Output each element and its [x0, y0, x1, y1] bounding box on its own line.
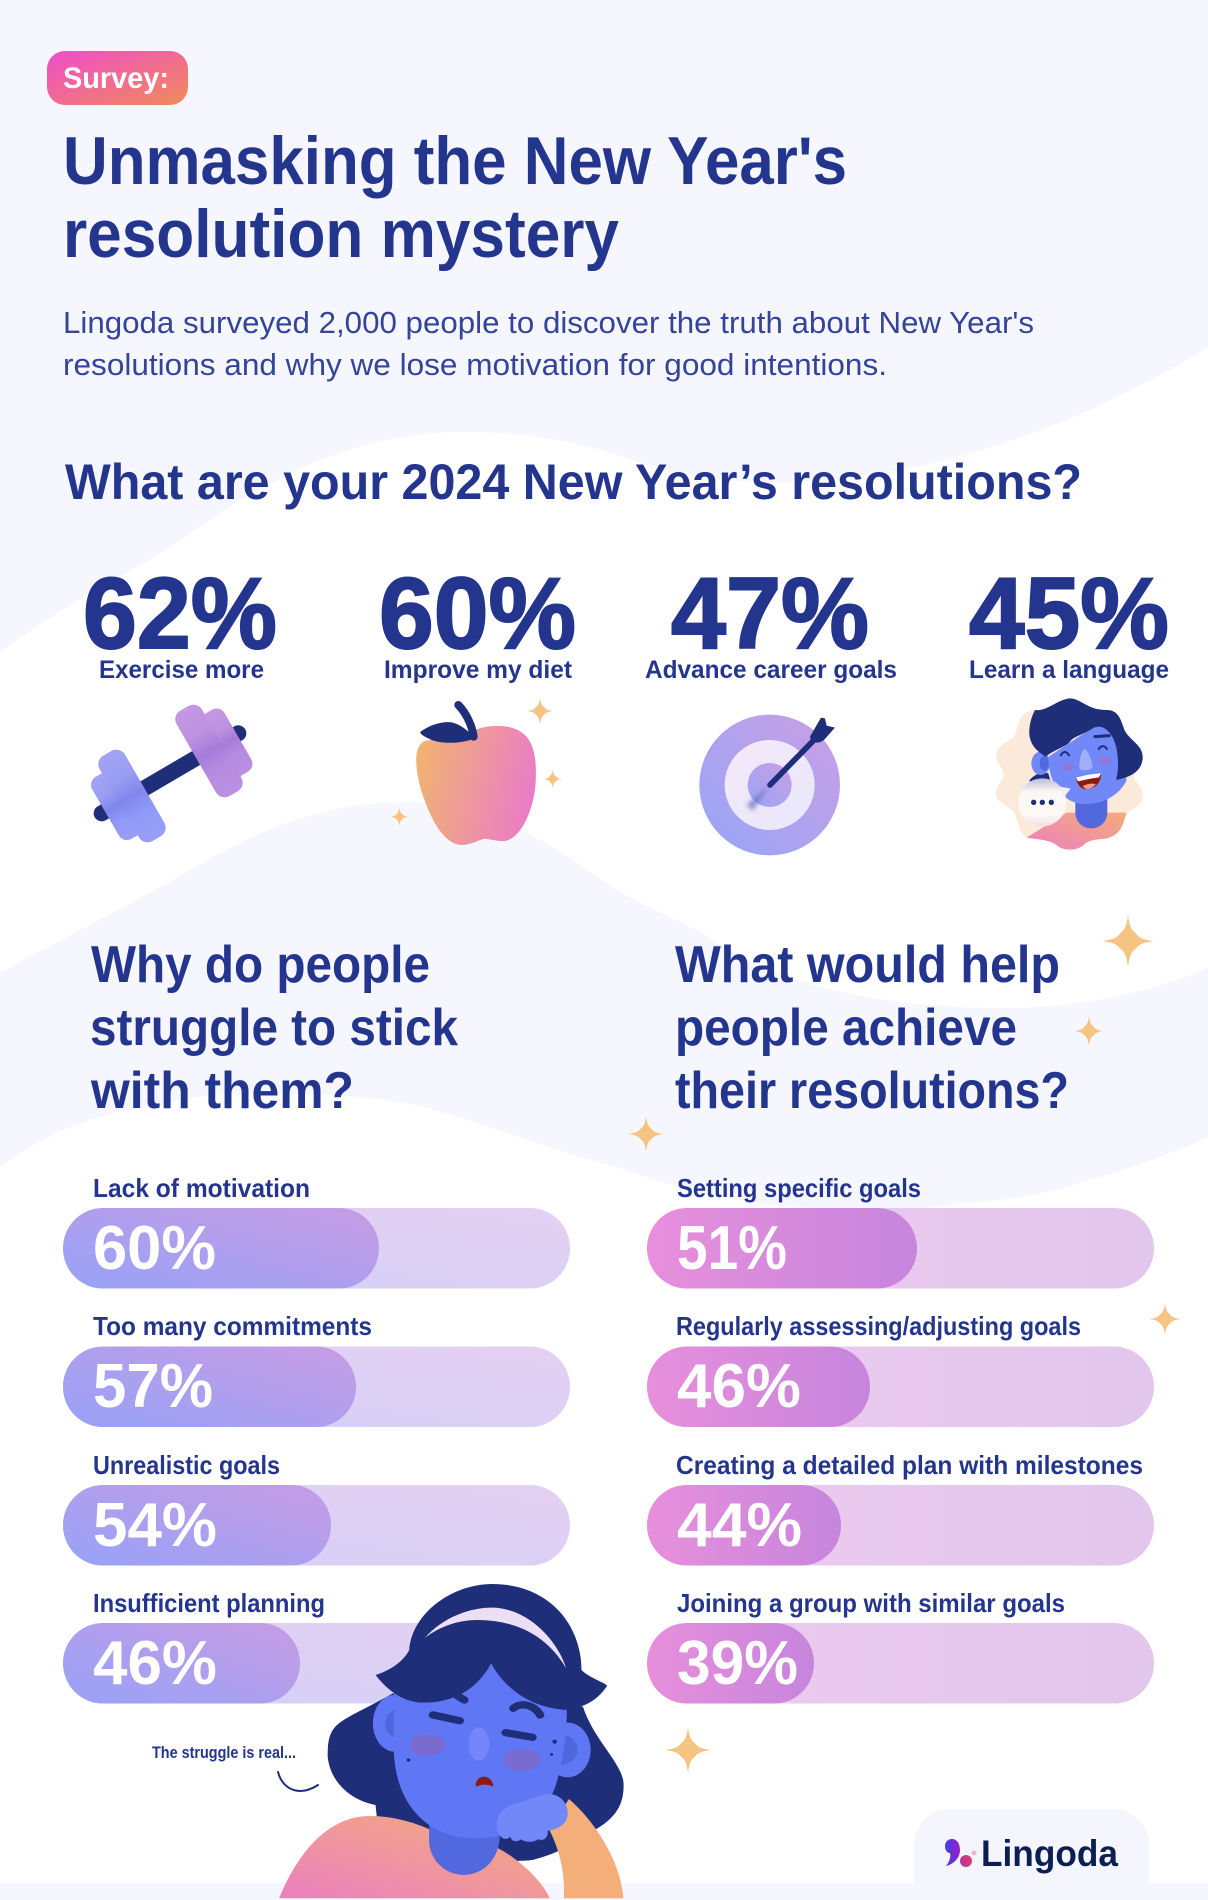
bar: detailed plan 44% [647, 1450, 1154, 1566]
bar: lack of motivation 60%: Lack of motivation [93, 1173, 310, 1203]
bar: assessing goals 46%: Regularly assessing/adjusting goals [676, 1311, 1081, 1341]
bar: detailed plan 44%: Creating a detailed plan with milestones [676, 1450, 1143, 1480]
bar: assessing goals 46%: 46% [677, 1352, 801, 1421]
heading: what would help [675, 936, 1069, 1120]
bar: setting specific goals 51%: 51% [677, 1214, 787, 1283]
bar: insufficient planning 46% [63, 1588, 570, 1704]
caption: the struggle is real: The struggle is real... [152, 1744, 296, 1762]
bar: joining a group 39%: Joining a group with similar goals [677, 1588, 1065, 1618]
stat: improve diet: 60% [379, 558, 576, 670]
title [63, 123, 847, 272]
intro paragraph: Lingoda surveyed 2,000 people to discover the truth about New Year's [63, 305, 1034, 340]
stat: advance career: 47% [671, 558, 869, 670]
sparkle: centre [628, 1116, 664, 1152]
stat: exercise more: Exercise more [99, 656, 264, 684]
title: Unmasking the New Year's [63, 123, 847, 199]
icon: apple with sparkles [390, 698, 562, 845]
intro paragraph: resolutions and why we lose motivation for good intentions. [63, 347, 887, 382]
heading: what would help: their resolutions? [675, 1062, 1069, 1120]
icon: target with arrow [699, 715, 840, 855]
heading: 2024 resolutions: What are your 2024 New Year’s resolutions? [65, 454, 1082, 510]
bar: unrealistic goals 54% [63, 1450, 570, 1566]
icon: dumbbell [88, 701, 256, 846]
heading: what would help: people achieve [675, 999, 1017, 1057]
survey badge [47, 51, 188, 105]
logo tab: Lingoda [914, 1809, 1149, 1883]
bar: setting specific goals 51%: Setting specific goals [677, 1173, 921, 1203]
logo tab: Lingoda: Lingoda [981, 1833, 1118, 1874]
bar: detailed plan 44%: 44% [677, 1491, 802, 1560]
bar: unrealistic goals 54%: Unrealistic goals [93, 1450, 280, 1480]
survey badge: Survey: [63, 62, 169, 95]
bar: too many commitments 57%: Too many commitments [93, 1311, 372, 1341]
sparkle: small right [1074, 1016, 1104, 1046]
stat: exercise more: 62% [83, 558, 277, 670]
bar: joining a group 39% [647, 1588, 1154, 1704]
bar: insufficient planning 46%: Insufficient planning [93, 1588, 325, 1618]
stat: improve diet: Improve my diet [384, 656, 573, 684]
heading: why people struggle: struggle to stick [90, 999, 458, 1057]
sparkle: lower centre [665, 1727, 711, 1773]
heading: why people struggle: with them? [90, 1062, 354, 1120]
heading: why people struggle: Why do people [91, 936, 430, 994]
bar: insufficient planning 46%: 46% [93, 1629, 217, 1698]
icon: smiling language learner [996, 698, 1143, 851]
bar: too many commitments 57%: 57% [93, 1352, 213, 1421]
sparkle: beside bars [1149, 1303, 1181, 1335]
bar: joining a group 39%: 39% [677, 1629, 798, 1698]
heading: what would help: What would help [675, 936, 1060, 994]
bar: assessing goals 46% [647, 1311, 1154, 1427]
heading: why people struggle [90, 936, 458, 1120]
stat: learn a language: 45% [969, 558, 1169, 670]
stat: advance career: Advance career goals [645, 656, 897, 684]
illustration: thinking woman [279, 1584, 624, 1898]
bar: lack of motivation 60% [63, 1173, 570, 1288]
sparkle: large [1102, 915, 1154, 967]
bar: too many commitments 57% [63, 1311, 570, 1427]
bar: lack of motivation 60%: 60% [93, 1214, 216, 1283]
intro paragraph [63, 305, 1034, 382]
bar: setting specific goals 51% [647, 1173, 1154, 1288]
stat: learn a language: Learn a language [969, 656, 1169, 684]
caption: the struggle is real [152, 1744, 318, 1791]
title: resolution mystery [63, 196, 619, 272]
bar: unrealistic goals 54%: 54% [93, 1491, 217, 1560]
